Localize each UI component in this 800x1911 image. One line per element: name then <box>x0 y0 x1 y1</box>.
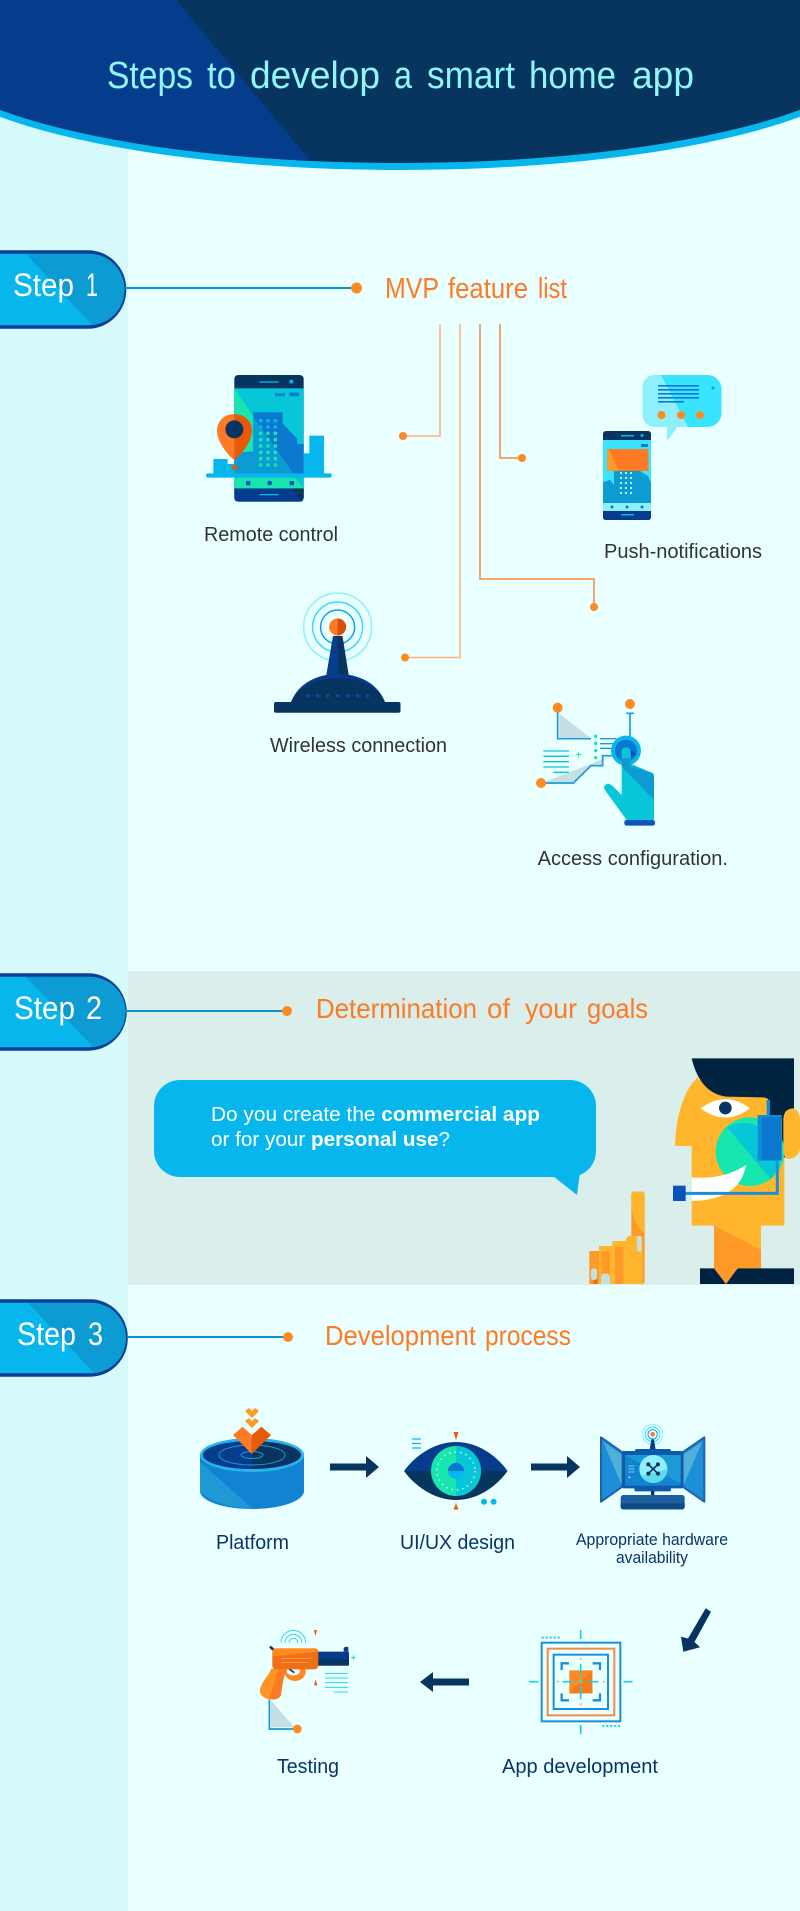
arrow: app development to testing <box>420 1672 469 1692</box>
heading: MVP feature list <box>385 273 567 305</box>
step 3 badge: 3 <box>88 1316 103 1352</box>
step 2 badge <box>0 975 126 1049</box>
heading: determination of your goals: your <box>525 993 577 1024</box>
heading: MVP feature list: feature <box>448 273 528 305</box>
label: appropriate hardware availability: Appropriate hardware <box>576 1530 728 1549</box>
connector: access configuration <box>480 324 598 611</box>
arrow: design to hardware <box>531 1456 580 1478</box>
title <box>107 55 694 97</box>
title: a <box>394 55 413 97</box>
title: to <box>207 55 236 97</box>
arrow: platform to design <box>330 1456 379 1478</box>
icon: wireless router <box>274 593 400 713</box>
step 3 connector <box>127 1332 293 1342</box>
connector: wireless connection <box>401 324 460 662</box>
label: wireless connection: Wireless connection <box>270 735 447 757</box>
label: appropriate hardware availability <box>576 1530 728 1567</box>
arrow: hardware to app development <box>681 1608 711 1652</box>
heading: determination of your goals: Determination <box>316 993 477 1024</box>
heading: development process: Development <box>325 1320 476 1351</box>
label: remote control: Remote control <box>204 524 338 546</box>
label: platform: Platform <box>216 1532 289 1554</box>
heading: MVP feature list: list <box>538 273 567 305</box>
panel: step 2 band <box>0 971 800 1285</box>
speech bubble: Do you create the commercial app <box>211 1103 540 1126</box>
phone <box>603 431 651 520</box>
icon: UI/UX eye <box>404 1432 508 1510</box>
heading: determination of your goals: goals <box>587 993 648 1024</box>
title: develop <box>250 55 380 97</box>
step 1 badge: 1 <box>86 267 98 303</box>
title: smart <box>427 55 515 97</box>
icon: remote control phone <box>206 375 332 502</box>
icon: push notifications <box>603 375 722 520</box>
title: home <box>529 55 616 97</box>
icon: platform <box>200 1408 304 1509</box>
label: testing: Testing <box>277 1756 339 1778</box>
connector: push notifications <box>500 324 526 462</box>
illustration: hand pointing up <box>589 1192 645 1284</box>
label: appropriate hardware availability: availability <box>616 1548 688 1567</box>
connector: remote control <box>399 324 440 440</box>
speech bubble: or for your personal use? <box>211 1128 450 1151</box>
heading: MVP feature list: MVP <box>385 273 439 305</box>
label: app development: App development <box>502 1756 658 1778</box>
step 3 badge: Step <box>17 1316 76 1352</box>
header banner <box>0 0 800 170</box>
heading: development process: process <box>485 1320 571 1351</box>
title: app <box>632 55 694 97</box>
heading: determination of your goals: of <box>487 993 510 1024</box>
title: Steps <box>107 55 193 97</box>
icon: hardware <box>601 1424 704 1509</box>
icon: access configuration <box>536 699 655 826</box>
step 2 badge: 2 <box>86 990 102 1026</box>
step 2 badge: Step <box>14 990 75 1026</box>
step 1 badge: Step <box>13 267 74 303</box>
heading: determination of your goals <box>316 993 648 1024</box>
label: UI/UX design: UI/UX design <box>400 1532 515 1554</box>
speech bubble <box>642 375 722 441</box>
illustration: person with headset <box>673 1058 800 1284</box>
speech bubble <box>154 1080 596 1195</box>
icon: app development <box>529 1630 633 1734</box>
step 2 connector <box>125 1006 292 1016</box>
label: push notifications: Push-notifications <box>604 541 762 563</box>
left sidebar stripe <box>0 0 128 1911</box>
icon: testing gun <box>260 1630 356 1733</box>
step 1 connector <box>125 282 362 294</box>
step 1 badge <box>0 252 125 327</box>
step 3 badge <box>0 1301 126 1375</box>
heading: development process <box>325 1320 571 1351</box>
label: access configuration: Access configuration. <box>538 848 728 870</box>
